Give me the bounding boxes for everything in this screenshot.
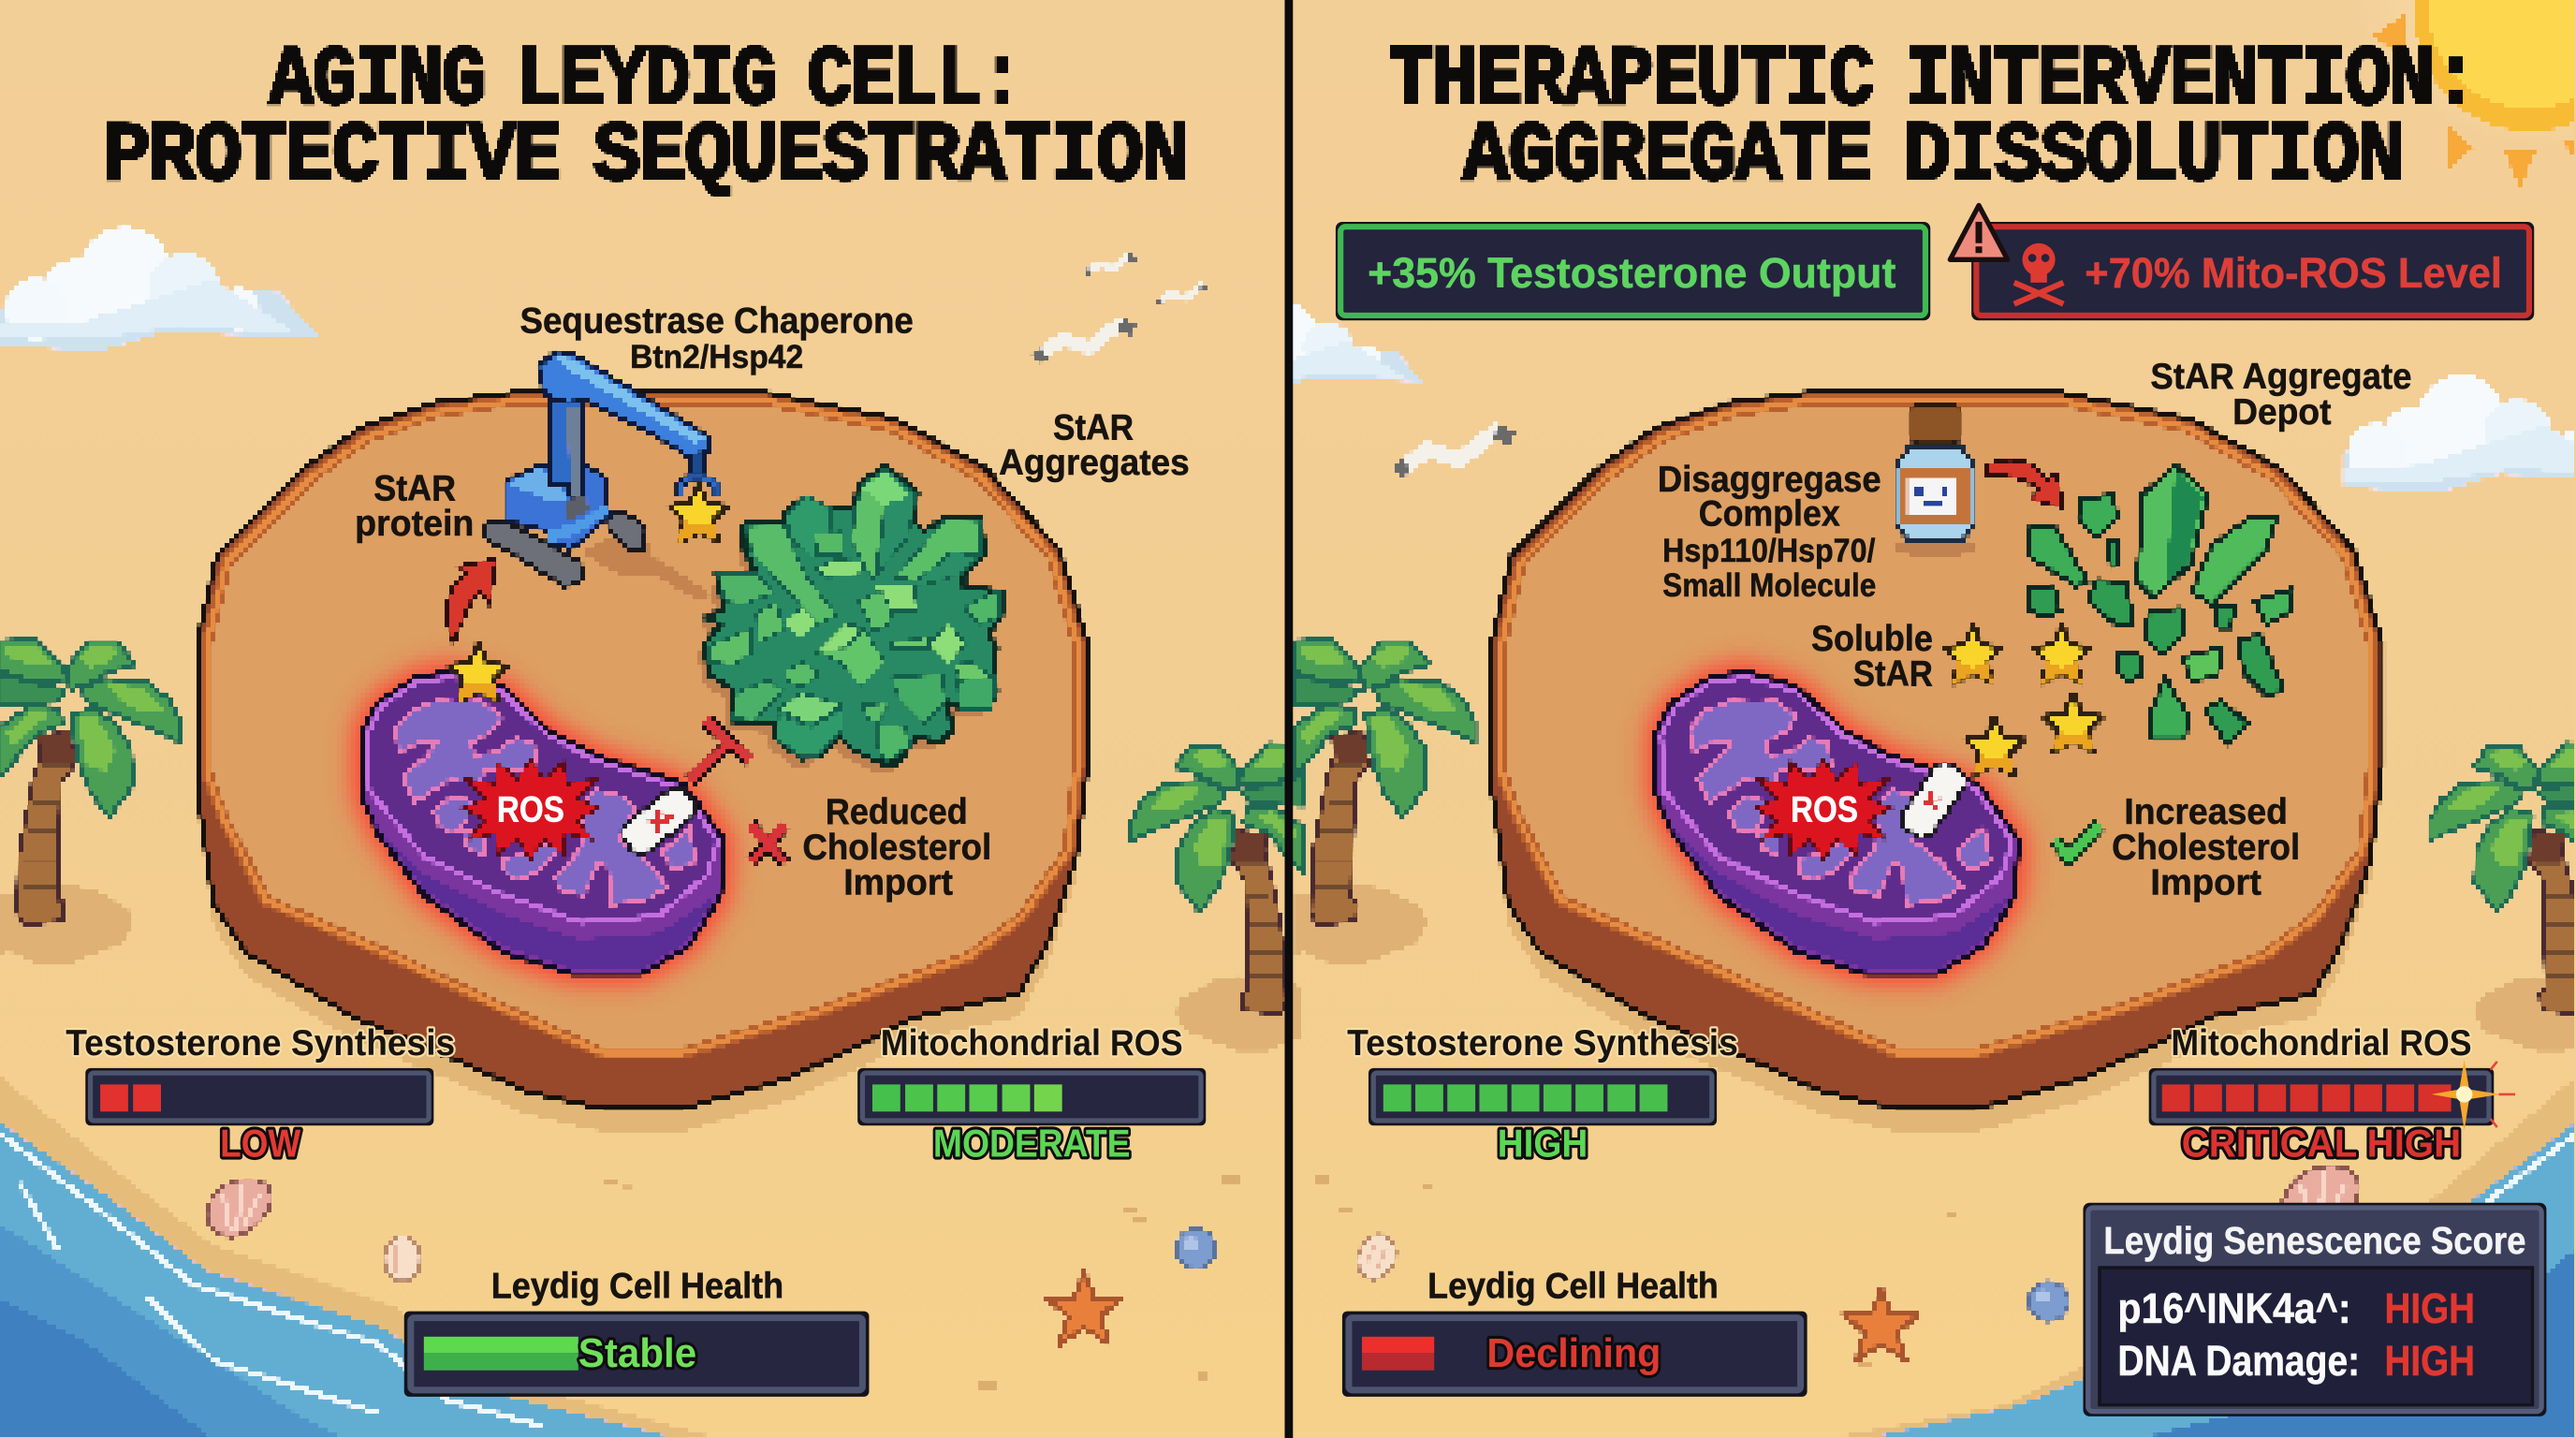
ocean: right bbox=[1823, 1077, 2576, 1438]
green check colour bbox=[2056, 825, 2100, 858]
ocean: left bbox=[0, 1077, 723, 1438]
red arrow: StAR to crane bbox=[446, 559, 496, 644]
ROS burst bbox=[1754, 759, 1893, 859]
title: left panel: AGING LEYDIG CELL: bbox=[269, 34, 1023, 130]
label: increased cholesterol import: Import bbox=[2150, 863, 2261, 903]
meter: mitochondrial ROS moderate: MODERATE bbox=[933, 1122, 1131, 1166]
label: disaggregase complex: Small Molecule bbox=[1662, 567, 1876, 604]
shells, pebbles and starfish bbox=[207, 1166, 2359, 1388]
label: StAR aggregate depot: StAR Aggregate bbox=[2150, 357, 2411, 397]
soluble StAR stars bbox=[1943, 624, 2103, 775]
red X mark bbox=[751, 825, 785, 862]
label: increased cholesterol import: Increased bbox=[2124, 792, 2288, 832]
label: StAR aggregates bbox=[999, 407, 1190, 483]
titles with pixel treatment bbox=[103, 34, 2477, 205]
cell island: right bbox=[1492, 392, 2382, 1132]
badge: testosterone output: +35% Testosterone Output bbox=[1368, 249, 1895, 297]
label: StAR aggregates: StAR bbox=[1053, 407, 1134, 448]
pill bbox=[1896, 757, 1971, 843]
meter: mitochondrial ROS moderate bbox=[857, 1023, 1206, 1166]
badge: mito-ROS level bbox=[1971, 222, 2534, 320]
title: left panel: PROTECTIVE SEQUESTRATION bbox=[103, 109, 1187, 205]
label: ROS right: ROS bbox=[1791, 790, 1858, 830]
cell island: left bbox=[198, 392, 1088, 1132]
inhibition T-bar colour bbox=[690, 720, 751, 781]
icon: warning triangle bbox=[1950, 205, 2008, 259]
label: reduced cholesterol import: Cholesterol bbox=[802, 828, 991, 868]
label: StAR aggregates: Aggregates bbox=[999, 443, 1190, 483]
label: sequestrase chaperone: Sequestrase Chaperone bbox=[520, 301, 914, 341]
mitochondrion with ROS: right bbox=[1656, 670, 2019, 975]
meter: testosterone synthesis low bbox=[66, 1023, 455, 1166]
meter: Leydig cell health declining bbox=[1342, 1267, 1808, 1397]
dissolving crystal fragments bbox=[2027, 465, 2293, 746]
meter: testosterone synthesis high bbox=[1347, 1023, 1738, 1166]
title: right panel: AGGREGATE DISSOLUTION bbox=[1462, 109, 2403, 205]
label: soluble StAR: Soluble bbox=[1811, 619, 1933, 659]
star on crane bbox=[668, 483, 728, 542]
label: StAR aggregate depot bbox=[2150, 357, 2411, 433]
title: right panel: THERAPEUTIC INTERVENTION: bbox=[1388, 34, 2477, 130]
label: ROS left: ROS bbox=[497, 790, 564, 830]
label: disaggregase complex: Hsp110/Hsp70/ bbox=[1662, 533, 1876, 569]
inhibition T-bar outline bbox=[690, 720, 751, 781]
label: reduced cholesterol import: Import bbox=[843, 863, 953, 903]
badge: testosterone output bbox=[1336, 222, 1930, 320]
title: left panel bbox=[103, 34, 1187, 205]
label: reduced cholesterol import bbox=[802, 792, 991, 903]
green check mark bbox=[2056, 825, 2100, 858]
label: increased cholesterol import bbox=[2112, 792, 2300, 903]
badge: mito-ROS level: +70% Mito-ROS Level bbox=[2085, 249, 2502, 297]
panel: Leydig senescence score: DNA Damage: bbox=[2117, 1337, 2360, 1385]
label: StAR aggregate depot: Depot bbox=[2232, 392, 2332, 433]
mitochondrion with ROS: left bbox=[361, 670, 724, 975]
crane chaperone bbox=[484, 351, 716, 599]
label: StAR protein: protein bbox=[355, 504, 474, 544]
label: soluble StAR bbox=[1811, 619, 1933, 695]
meter: mitochondrial ROS critical high: Mitochondrial ROS bbox=[2171, 1023, 2472, 1064]
meter: testosterone synthesis low: LOW bbox=[220, 1122, 300, 1166]
panel: Leydig senescence score: p16^INK4a^: bbox=[2117, 1284, 2351, 1332]
star on mitochondrion bbox=[448, 642, 507, 701]
pill bbox=[617, 783, 701, 859]
meter: testosterone synthesis low: Testosterone Synthesis bbox=[66, 1023, 455, 1064]
palm trees bbox=[0, 639, 2576, 1051]
ROS burst bbox=[461, 759, 600, 859]
label: sequestrase chaperone bbox=[520, 301, 914, 375]
label: reduced cholesterol import: Reduced bbox=[826, 792, 968, 832]
red arrow: vial to aggregate bbox=[1984, 460, 2063, 507]
meter: Leydig cell health stable bbox=[404, 1267, 869, 1397]
icon: skull and crossbones bbox=[2014, 243, 2063, 304]
label: disaggregase complex: Complex bbox=[1699, 494, 1840, 535]
icon: spark burst bbox=[2432, 1060, 2515, 1131]
label: StAR protein bbox=[355, 468, 474, 544]
meter: testosterone synthesis high: HIGH bbox=[1498, 1122, 1588, 1166]
meter: Leydig cell health declining: Declining bbox=[1486, 1330, 1661, 1376]
meter: mitochondrial ROS critical high bbox=[2149, 1023, 2515, 1166]
meter: Leydig cell health declining: Leydig Cell Health bbox=[1427, 1267, 1719, 1307]
label: StAR protein: StAR bbox=[373, 468, 456, 508]
disaggregase vial bbox=[1893, 404, 1978, 557]
label: disaggregase complex: Disaggregase bbox=[1658, 460, 1881, 500]
meter: testosterone synthesis high: Testosterone Synthesis bbox=[1347, 1023, 1738, 1064]
label: sequestrase chaperone: Btn2/Hsp42 bbox=[630, 339, 803, 375]
panel: Leydig senescence score bbox=[2083, 1203, 2546, 1416]
panel: Leydig senescence score: HIGH bbox=[2385, 1284, 2475, 1332]
seagulls bbox=[1035, 256, 1512, 473]
meter: Leydig cell health stable: Stable bbox=[578, 1330, 696, 1376]
panel: Leydig senescence score: Leydig Senescence Score bbox=[2103, 1219, 2525, 1262]
label: disaggregase complex bbox=[1658, 460, 1881, 604]
label: soluble StAR: StAR bbox=[1853, 654, 1933, 695]
green StAR aggregate crystals bbox=[698, 465, 1002, 772]
meter: mitochondrial ROS critical high: CRITICAL HIGH bbox=[2182, 1122, 2461, 1166]
sun bbox=[2136, 0, 2576, 296]
panel: Leydig senescence score: HIGH bbox=[2385, 1337, 2475, 1385]
divider bbox=[1284, 0, 1293, 1438]
meter: Leydig cell health stable: Leydig Cell Health bbox=[491, 1267, 783, 1307]
label: increased cholesterol import: Cholesterol bbox=[2112, 828, 2300, 868]
meter: mitochondrial ROS moderate: Mitochondrial ROS bbox=[881, 1023, 1183, 1064]
clouds bbox=[0, 227, 2576, 493]
red X colour bbox=[751, 825, 785, 862]
title: right panel bbox=[1388, 34, 2477, 205]
